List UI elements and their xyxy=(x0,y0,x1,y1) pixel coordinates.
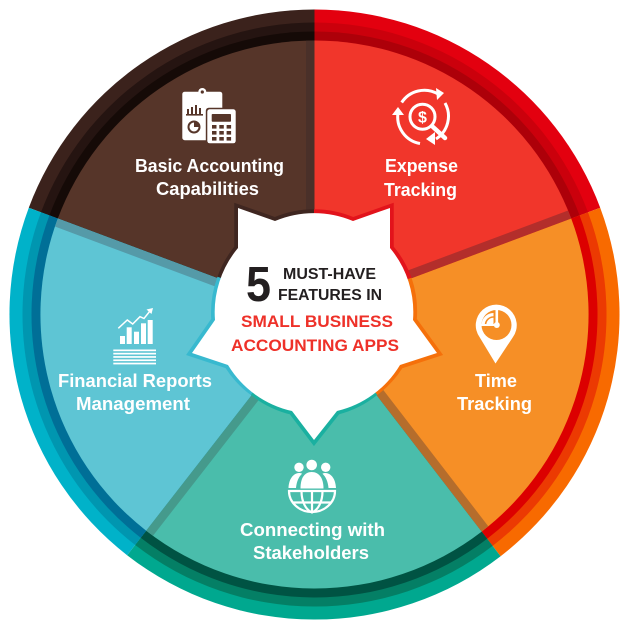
icon: expense magnifier with arrows: $ xyxy=(418,110,427,126)
title: ACCOUNTING APPS xyxy=(231,336,399,355)
title: MUST-HAVE xyxy=(283,266,376,283)
title: SMALL BUSINESS xyxy=(241,312,393,331)
title: FEATURES IN xyxy=(278,287,382,304)
panel: basic accounting capabilities segment xyxy=(29,9,315,314)
label: basic accounting capabilities: Capabilities xyxy=(156,178,259,199)
icon: people above globe xyxy=(288,460,336,512)
label: time tracking xyxy=(457,370,532,414)
title: 5 xyxy=(246,258,271,312)
title xyxy=(231,258,399,355)
label: basic accounting capabilities: Basic Accounting xyxy=(135,155,284,176)
label: time tracking: Tracking xyxy=(457,393,532,414)
label: financial reports management: Management xyxy=(76,393,190,414)
panel: expense tracking segment xyxy=(314,10,600,314)
label: connecting with stakeholders: Stakeholders xyxy=(253,542,369,563)
label: connecting with stakeholders: Connecting with xyxy=(240,519,385,540)
panel: connecting with stakeholders segment xyxy=(127,314,501,620)
label: time tracking: Time xyxy=(475,370,517,391)
icon: expense magnifier with arrows xyxy=(392,88,448,145)
icon: clipboard and calculator xyxy=(182,88,237,145)
label: financial reports management: Financial Reports xyxy=(58,370,212,391)
label: expense tracking xyxy=(384,155,458,200)
panel: time tracking segment xyxy=(314,208,620,556)
icon: time location pin xyxy=(476,305,517,364)
label: expense tracking: Tracking xyxy=(384,179,457,200)
panel: financial reports management segment xyxy=(9,208,315,555)
label: expense tracking: Expense xyxy=(385,155,458,176)
central badge xyxy=(192,208,437,440)
label: connecting with stakeholders xyxy=(240,519,385,563)
icon: growth bar chart xyxy=(113,308,156,364)
label: basic accounting capabilities xyxy=(135,155,284,199)
label: financial reports management xyxy=(58,370,212,414)
